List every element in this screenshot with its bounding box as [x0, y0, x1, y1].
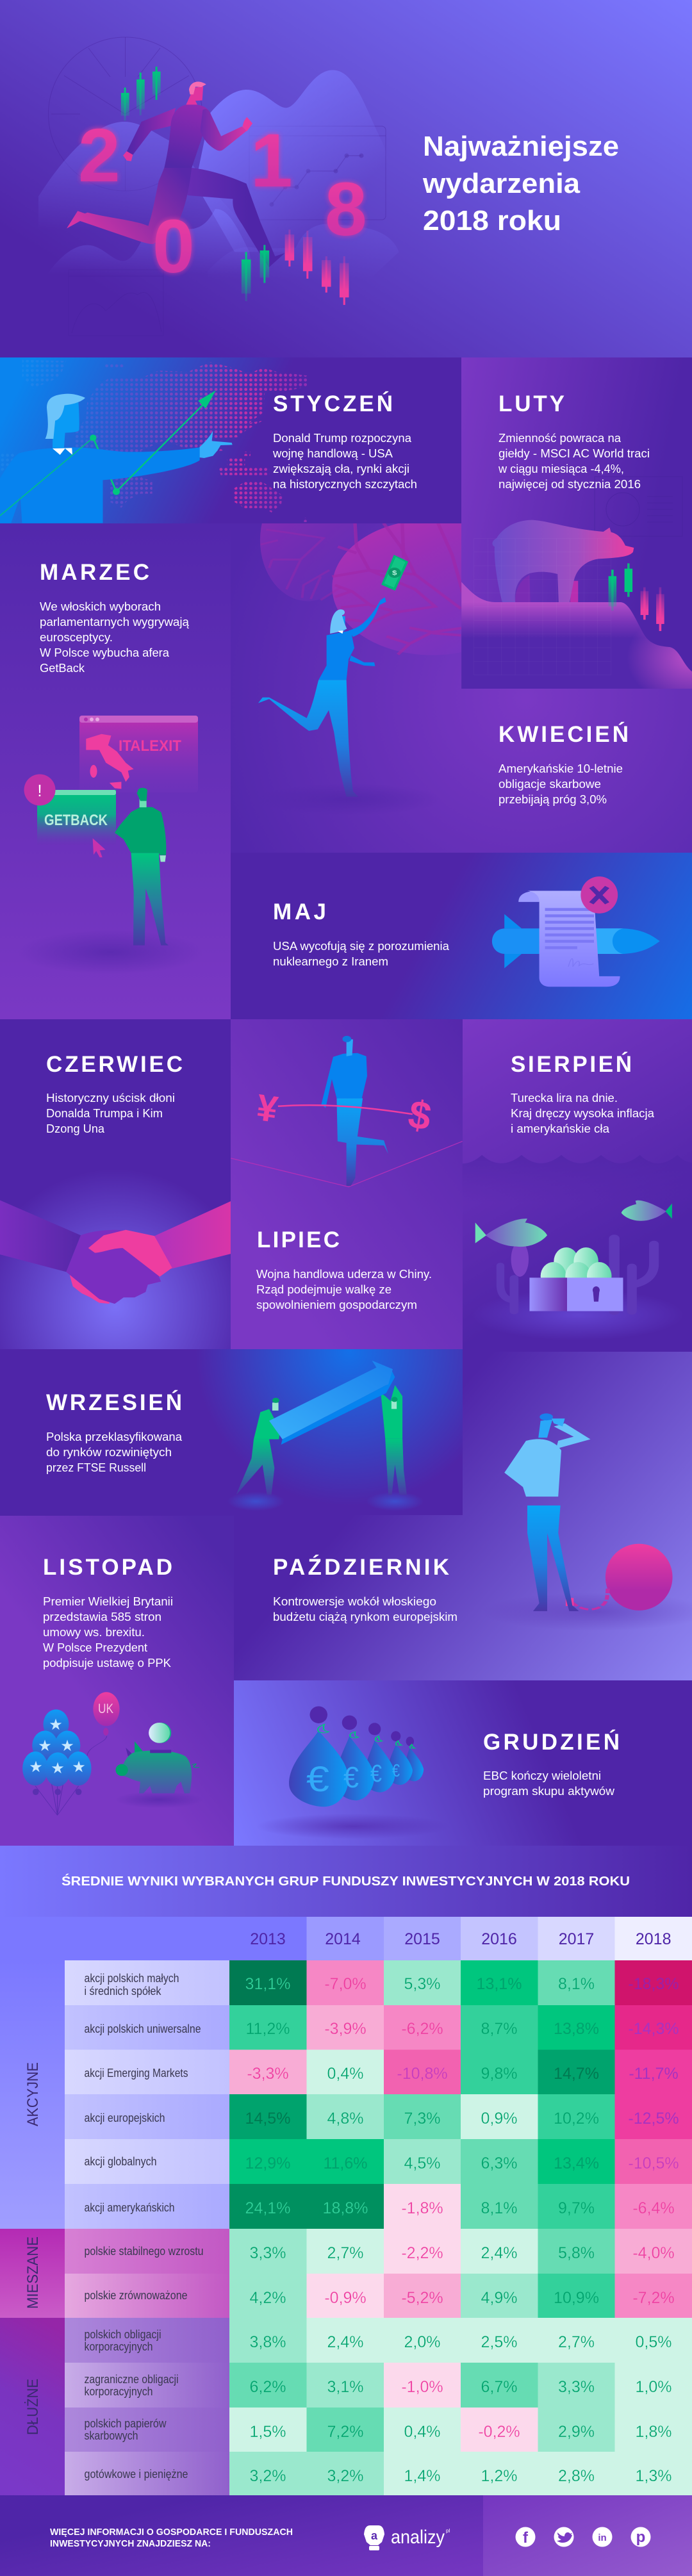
year digits 2018: 0	[152, 204, 195, 289]
illustration: banknote	[381, 555, 408, 591]
text: czerwiec	[46, 1092, 175, 1135]
text: styczeń: wojnę handlową - USA	[272, 447, 393, 460]
heading: marzec: MARZEC	[40, 560, 149, 585]
icon: euro signs: €	[392, 1760, 400, 1780]
table header years: 2016	[481, 1930, 517, 1948]
table header years	[0, 1917, 692, 1960]
row: zagraniczne obligacji korporacyjnych	[65, 2363, 692, 2408]
text: footer note: WIĘCEJ INFORMACJI O GOSPODARCE I FUNDUSZACH	[50, 2527, 293, 2538]
illustration: italexit and getback	[24, 716, 198, 857]
text: grudzień: program skupu aktywów	[483, 1785, 615, 1798]
row: zagraniczne obligacji korporacyjnych: 6,2%	[250, 2378, 286, 2396]
row: akcji Emerging Markets: 9,8%	[481, 2065, 517, 2083]
text: listopad: Premier Wielkiej Brytanii	[43, 1595, 173, 1608]
text: grudzień: EBC kończy wieloletni	[483, 1769, 601, 1782]
row: zagraniczne obligacji korporacyjnych: korporacyjnych	[85, 2385, 152, 2398]
row: zagraniczne obligacji korporacyjnych: 6,7%	[481, 2378, 517, 2396]
row: zagraniczne obligacji korporacyjnych: zagraniczne obligacji	[85, 2373, 178, 2386]
illustration: tree	[260, 523, 461, 655]
table header years: 2017	[559, 1930, 594, 1948]
illustration: missile and torn treaty	[492, 876, 660, 987]
text: czerwiec: Donalda Trumpa i Kim	[46, 1107, 163, 1120]
runner figure	[67, 82, 285, 267]
row: polskie zrównoważone: 4,9%	[481, 2289, 517, 2307]
row: polskich papierów skarbowych: skarbowych	[85, 2429, 138, 2442]
text: listopad	[43, 1595, 173, 1669]
row: akcji amerykańskich: 18,8%	[323, 2199, 368, 2217]
text: maj: nuklearnego z Iranem	[273, 955, 388, 968]
row: akcji amerykańskich	[65, 2184, 692, 2229]
row: akcji polskich uniwersalne: -3,9%	[324, 2020, 367, 2038]
row: polskie stabilnego wzrostu: 2,4%	[481, 2244, 517, 2262]
year digits 2018	[78, 113, 367, 289]
icon: twitter	[554, 2527, 574, 2547]
category: mieszane: MIESZANE	[24, 2236, 42, 2309]
text: kwiecień: obligacje skarbowe	[498, 778, 601, 791]
text: październik: budżetu ciążą rynkom europejskim	[273, 1611, 457, 1623]
row: polskie stabilnego wzrostu	[65, 2229, 692, 2274]
row: polskich papierów skarbowych	[65, 2408, 692, 2452]
row: gotówkowe i pieniężne: gotówkowe i pieniężne	[85, 2468, 188, 2481]
text: footer note: INWESTYCYJNYCH ZNAJDZIESZ NA:	[50, 2538, 211, 2549]
illustration: sea waves	[463, 1155, 692, 1216]
row: polskich papierów skarbowych: 2,9%	[558, 2423, 595, 2441]
row: akcji polskich uniwersalne: 13,8%	[554, 2020, 599, 2038]
row: gotówkowe i pieniężne: 3,2%	[327, 2467, 363, 2485]
row: akcji polskich małych i średnich spółek	[65, 1960, 692, 2005]
row: akcji polskich małych i średnich spółek: akcji polskich małych	[85, 1972, 179, 1985]
text: lipiec: Wojna handlowa uderza w Chiny.	[256, 1268, 432, 1281]
panel: kwiecień	[498, 721, 629, 806]
row: polskich obligacji korporacyjnych: 3,8%	[250, 2333, 286, 2351]
illustration: two people lifting arrow	[227, 1361, 424, 1511]
icon: euro signs: €	[306, 1759, 329, 1799]
heading: luty: LUTY	[498, 391, 564, 416]
panel: table title	[0, 1846, 692, 1917]
row: polskie zrównoważone: 4,2%	[250, 2289, 286, 2307]
text: marzec	[40, 600, 190, 675]
illustration: woman reaching	[256, 597, 441, 816]
row: akcji Emerging Markets	[65, 2050, 692, 2095]
icon: facebook	[515, 2527, 536, 2547]
panel: grudzień	[234, 1680, 692, 1846]
row: zagraniczne obligacji korporacyjnych: 3,1%	[327, 2378, 363, 2396]
row: polskich obligacji korporacyjnych	[65, 2318, 692, 2363]
text: wrzesień: do rynków rozwiniętych	[46, 1446, 172, 1459]
illustration: banknote: $	[392, 569, 397, 577]
category: akcyjne: AKCYJNE	[24, 2062, 42, 2126]
illustration: treasure chest, cacti and fish	[472, 1201, 684, 1340]
illustration: bear on hill	[461, 520, 692, 689]
world map dots	[0, 357, 308, 523]
row: akcji polskich uniwersalne	[65, 2005, 692, 2050]
text: kwiecień: przebijają próg 3,0%	[498, 793, 607, 806]
illustration: piggy bank	[115, 1723, 203, 1809]
row: akcji polskich małych i średnich spółek: 8,1%	[558, 1975, 595, 1993]
row: zagraniczne obligacji korporacyjnych: -1,0%	[401, 2378, 443, 2396]
row: zagraniczne obligacji korporacyjnych: 1,0%	[636, 2378, 671, 2396]
row: polskie zrównoważone: 10,9%	[554, 2289, 599, 2307]
row: polskich obligacji korporacyjnych: 2,5%	[481, 2333, 517, 2351]
text: maj	[273, 940, 450, 968]
illustration: italexit and getback: ITALEXIT	[119, 737, 181, 755]
logo: analizy.pl: analizy	[391, 2527, 445, 2548]
panel: listopad	[0, 1516, 234, 1846]
text: lipiec: Rząd podejmuje walkę ze	[256, 1283, 391, 1296]
row: akcji globalnych: akcji globalnych	[85, 2155, 156, 2168]
row: akcji europejskich: 7,3%	[404, 2110, 440, 2128]
illustration: italexit and getback: GETBACK	[44, 812, 108, 829]
row: polskich obligacji korporacyjnych: 2,0%	[404, 2333, 440, 2351]
row: polskich papierów skarbowych: 0,4%	[404, 2423, 440, 2441]
row: gotówkowe i pieniężne	[65, 2452, 692, 2496]
row: gotówkowe i pieniężne: 2,8%	[558, 2467, 595, 2485]
icon: euro signs	[306, 1759, 400, 1799]
icon: facebook: f	[523, 2529, 529, 2547]
panel: lipiec	[231, 1019, 463, 1349]
row: polskie stabilnego wzrostu: 3,3%	[250, 2244, 286, 2262]
text: maj: USA wycofują się z porozumienia	[273, 940, 450, 953]
text: marzec: GetBack	[40, 662, 85, 675]
text: sierpień: i amerykańskie cła	[511, 1122, 610, 1135]
text: kwiecień	[498, 762, 623, 806]
row: akcji amerykańskich: akcji amerykańskich	[85, 2201, 174, 2214]
row: polskie stabilnego wzrostu: -2,2%	[401, 2244, 443, 2262]
category: dłużne: DŁUŻNE	[24, 2379, 42, 2435]
row: akcji Emerging Markets: -11,7%	[629, 2065, 679, 2083]
heading: październik: PAŹDZIERNIK	[273, 1554, 449, 1580]
panel: sierpień	[463, 1019, 692, 1352]
row: akcji globalnych: 6,3%	[481, 2154, 517, 2172]
illustration: man in green	[18, 788, 203, 974]
title: Najważniejsze	[423, 131, 619, 162]
illustration: handshake	[0, 1201, 231, 1304]
row: akcji europejskich: 10,2%	[554, 2110, 599, 2128]
row: polskie stabilnego wzrostu: 2,7%	[327, 2244, 363, 2262]
row: akcji europejskich: 4,8%	[327, 2110, 363, 2128]
text: sierpień: Kraj dręczy wysoka inflacja	[511, 1107, 655, 1120]
row: akcji polskich małych i średnich spółek: 31,1%	[245, 1975, 290, 1993]
row: akcji polskich małych i średnich spółek: i średnich spółek	[85, 1985, 161, 1998]
icon: pinterest	[630, 2527, 651, 2547]
row: polskich obligacji korporacyjnych: korporacyjnych	[85, 2340, 152, 2353]
text: luty: w ciągu miesiąca -4,4%,	[498, 463, 624, 475]
row: akcji polskich uniwersalne: -14,3%	[628, 2020, 679, 2038]
icon: pinterest: p	[636, 2529, 645, 2546]
row: akcji Emerging Markets: akcji Emerging Markets	[85, 2067, 188, 2080]
row: akcji europejskich: 14,5%	[245, 2110, 290, 2128]
text: styczeń: na historycznych szczytach	[273, 478, 417, 491]
panel: right column and październik	[234, 1352, 692, 1680]
text: luty: najwięcej od stycznia 2016	[498, 478, 641, 491]
text: lipiec	[256, 1268, 432, 1311]
illustration: man with ball and chain	[481, 1413, 692, 1631]
row: polskich obligacji korporacyjnych: 2,4%	[327, 2333, 363, 2351]
heading: kwiecień: KWIECIEŃ	[498, 721, 629, 747]
text: listopad: podpisuje ustawę o PPK	[43, 1657, 171, 1669]
text: styczeń: zwiększają cła, rynki akcji	[273, 463, 409, 475]
logo: analizy.pl	[364, 2525, 450, 2550]
row: polskie stabilnego wzrostu: -4,0%	[632, 2244, 675, 2262]
text: październik	[273, 1595, 457, 1623]
icon: star balloons labels: ★	[51, 1760, 65, 1777]
category: akcyjne	[0, 1960, 65, 2229]
text: marzec: We włoskich wyborach	[40, 600, 161, 613]
row: polskie zrównoważone: -0,9%	[324, 2289, 367, 2307]
row: akcji polskich małych i średnich spółek: -18,3%	[628, 1975, 679, 1993]
text: grudzień	[483, 1769, 615, 1798]
text: styczeń	[272, 432, 417, 491]
icon: star balloons labels: ★	[38, 1737, 52, 1755]
hero mountains	[38, 70, 401, 314]
row: akcji amerykańskich: -6,4%	[632, 2199, 675, 2217]
panel: center tree background	[246, 523, 692, 853]
row: akcji amerykańskich: 24,1%	[245, 2199, 290, 2217]
table header years: 2018	[636, 1930, 671, 1948]
panel: maj	[231, 853, 692, 1019]
category: dłużne	[0, 2318, 65, 2495]
category: mieszane	[0, 2229, 65, 2318]
table header years: 2015	[404, 1930, 440, 1948]
text: sierpień	[511, 1092, 655, 1135]
text: luty: giełdy - MSCI AC World traci	[498, 447, 650, 460]
row: polskich papierów skarbowych: 1,8%	[636, 2423, 671, 2441]
heading: listopad: LISTOPAD	[43, 1555, 172, 1580]
hero candlesticks	[121, 67, 349, 305]
text: marzec: eurosceptycy.	[40, 631, 113, 644]
row: polskich obligacji korporacyjnych: polskich obligacji	[85, 2328, 161, 2341]
text: wrzesień	[46, 1431, 183, 1474]
heading: table title: ŚREDNIE WYNIKI WYBRANYCH GRUP FUNDUSZY INWESTYCYJNYCH W 2018 ROKU	[62, 1873, 630, 1889]
panel: marzec background and content	[0, 523, 231, 1019]
text: listopad: przedstawia 585 stron	[43, 1611, 161, 1623]
text: sierpień: Turecka lira na dnie.	[511, 1092, 618, 1104]
row: polskich obligacji korporacyjnych: 2,7%	[558, 2333, 595, 2351]
text: wrzesień: Polska przeklasyfikowana	[46, 1431, 183, 1443]
row: akcji globalnych: 11,6%	[323, 2154, 368, 2172]
title: 2018 roku	[423, 205, 561, 236]
row: polskie zrównoważone: -7,2%	[632, 2289, 675, 2307]
row: polskich papierów skarbowych: 7,2%	[327, 2423, 363, 2441]
row: akcji polskich małych i średnich spółek: 5,3%	[404, 1975, 440, 1993]
row: gotówkowe i pieniężne: 1,3%	[636, 2467, 671, 2485]
heading: styczeń: STYCZEŃ	[273, 391, 393, 416]
text: marzec: parlamentarnych wygrywają	[40, 616, 190, 628]
row: akcji polskich uniwersalne: 11,2%	[245, 2020, 290, 2038]
text: footer note	[50, 2527, 293, 2549]
text: październik: Kontrowersje wokół włoskiego	[273, 1595, 436, 1608]
text: luty	[498, 432, 650, 491]
icon: star balloons labels: ★	[29, 1759, 43, 1776]
text: styczeń: Donald Trump rozpoczyna	[273, 432, 412, 445]
title: wydarzenia	[422, 168, 581, 199]
row: polskich obligacji korporacyjnych: 0,5%	[636, 2333, 671, 2351]
icon: star balloons labels: ★	[72, 1759, 86, 1776]
text: wrzesień: przez FTSE Russell	[46, 1461, 146, 1474]
row: akcji globalnych: 4,5%	[404, 2154, 440, 2172]
text: luty: Zmienność powraca na	[498, 432, 622, 445]
illustration: balloons with stars and UK balloon	[22, 1692, 120, 1816]
table header years: 2013	[250, 1930, 286, 1948]
row: akcji europejskich: 0,9%	[481, 2110, 517, 2128]
year digits 2018: 8	[325, 167, 367, 252]
text: listopad: W Polsce Prezydent	[43, 1641, 147, 1654]
text: czerwiec: Dzong Una	[46, 1122, 105, 1135]
title	[422, 131, 619, 236]
panel: czerwiec	[0, 1019, 231, 1349]
row: akcji amerykańskich: 9,7%	[558, 2199, 595, 2217]
row: akcji europejskich	[65, 2094, 692, 2140]
row: akcji globalnych: 12,9%	[245, 2154, 290, 2172]
icon: star balloons labels: ★	[60, 1737, 74, 1755]
row: polskie zrównoważone: polskie zrównoważone	[85, 2289, 187, 2302]
row: akcji globalnych	[65, 2139, 692, 2184]
row: akcji polskich małych i średnich spółek: -7,0%	[324, 1975, 367, 1993]
illustration: italexit and getback: !	[37, 781, 42, 800]
year digits 2018: 1	[251, 119, 293, 203]
icon: linkedin	[592, 2527, 613, 2547]
heading: sierpień: SIERPIEŃ	[511, 1051, 632, 1077]
text: listopad: umowy ws. brexitu.	[43, 1626, 145, 1639]
row: gotówkowe i pieniężne: 1,4%	[404, 2467, 440, 2485]
logo: analizy.pl: a	[371, 2529, 378, 2542]
illustration: tightrope walker with currencies	[231, 1036, 463, 1187]
illustration: man pointing with chart	[0, 390, 233, 523]
text: UK balloon label: UK	[98, 1702, 113, 1716]
row: polskie stabilnego wzrostu: polskie stabilnego wzrostu	[85, 2245, 204, 2258]
year digits 2018: 2	[78, 113, 120, 198]
text: kwiecień: Amerykańskie 10-letnie	[498, 762, 623, 775]
row: zagraniczne obligacji korporacyjnych: 3,3%	[558, 2378, 595, 2396]
heading: wrzesień: WRZESIEŃ	[46, 1390, 182, 1415]
row: akcji europejskich: -12,5%	[628, 2110, 679, 2128]
row: akcji polskich uniwersalne: 8,7%	[481, 2020, 517, 2038]
row: akcji Emerging Markets: 0,4%	[327, 2065, 363, 2083]
row: akcji polskich uniwersalne: akcji polskich uniwersalne	[85, 2022, 201, 2035]
row: akcji Emerging Markets: 14,7%	[554, 2065, 599, 2083]
row: akcji Emerging Markets: -10,8%	[397, 2065, 448, 2083]
panel: luty	[461, 357, 692, 689]
row: polskich papierów skarbowych: polskich papierów	[85, 2417, 167, 2430]
faint window chart	[595, 477, 682, 536]
text: marzec: W Polsce wybucha afera	[40, 646, 170, 659]
row: gotówkowe i pieniężne: 3,2%	[250, 2467, 286, 2485]
panel: hero	[0, 0, 692, 357]
row: akcji amerykańskich: -1,8%	[401, 2199, 443, 2217]
row: akcji amerykańskich: 8,1%	[481, 2199, 517, 2217]
text: lipiec: spowolnieniem gospodarczym	[256, 1299, 417, 1311]
heading: grudzień: GRUDZIEŃ	[483, 1729, 620, 1755]
panel: footer	[0, 2495, 692, 2576]
logo: analizy.pl: pl	[446, 2528, 450, 2534]
panel: wrzesień	[0, 1349, 463, 1516]
heading: czerwiec: CZERWIEC	[46, 1052, 183, 1077]
row: akcji polskich uniwersalne: -6,2%	[401, 2020, 443, 2038]
heading: lipiec: LIPIEC	[257, 1227, 340, 1252]
row: akcji Emerging Markets: -3,3%	[247, 2065, 289, 2083]
row: akcji europejskich: akcji europejskich	[85, 2112, 165, 2124]
table header years: 2014	[325, 1930, 361, 1948]
row: polskie stabilnego wzrostu: 5,8%	[558, 2244, 595, 2262]
icon: yen sign: ¥	[254, 1087, 280, 1131]
row: polskie zrównoważone: -5,2%	[401, 2289, 443, 2307]
row: akcji polskich małych i średnich spółek: 13,1%	[477, 1975, 522, 1993]
hero faint chart decorations	[49, 37, 386, 336]
icon: linkedin: in	[598, 2532, 607, 2543]
text: czerwiec: Historyczny uścisk dłoni	[46, 1092, 175, 1104]
icon: dollar sign: $	[405, 1092, 434, 1139]
row: polskie zrównoważone	[65, 2274, 692, 2318]
icon: euro signs: €	[343, 1760, 359, 1794]
icon: star balloons labels	[29, 1716, 86, 1777]
row: polskich papierów skarbowych: -0,2%	[478, 2423, 520, 2441]
panel: styczeń	[0, 357, 461, 523]
row: akcji globalnych: -10,5%	[628, 2154, 679, 2172]
illustration: euro money bags	[256, 1706, 450, 1839]
icon: star balloons labels: ★	[49, 1716, 63, 1734]
row: gotówkowe i pieniężne: 1,2%	[481, 2467, 517, 2485]
heading: maj: MAJ	[273, 899, 326, 924]
icon: euro signs: €	[370, 1760, 382, 1787]
table: fund results heatmap	[0, 1917, 692, 2496]
row: polskich papierów skarbowych: 1,5%	[250, 2423, 286, 2441]
row: akcji globalnych: 13,4%	[554, 2154, 599, 2172]
